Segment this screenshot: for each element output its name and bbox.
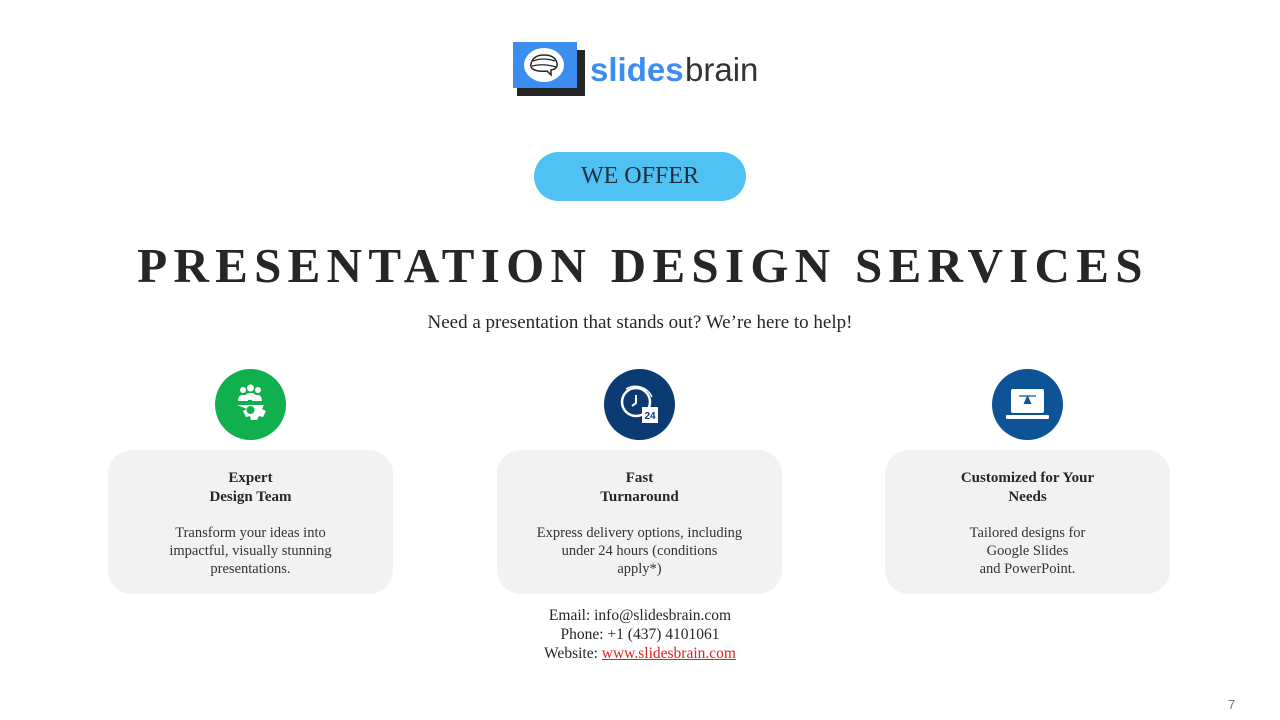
badge: we offer xyxy=(534,152,746,201)
page number: 7 xyxy=(1228,697,1235,712)
icon: clock 24 xyxy=(604,369,675,440)
card: fast turnaround xyxy=(497,450,782,594)
contact info: Phone: +1 (437) 4101061 xyxy=(560,626,720,643)
logo xyxy=(513,42,758,96)
subtitle: Need a presentation that stands out? We’re here to help! xyxy=(428,312,852,333)
contact info: Email: info@slidesbrain.com xyxy=(549,607,731,624)
logo: brain xyxy=(685,51,758,88)
card: fast turnaround: Express delivery options, including xyxy=(537,525,742,541)
card: expert design team: impactful, visually stunning xyxy=(169,543,332,559)
card: expert design team xyxy=(108,450,393,594)
card: fast turnaround: apply*) xyxy=(617,561,662,577)
card: fast turnaround: under 24 hours (conditions xyxy=(562,543,717,559)
icon: laptop design xyxy=(992,369,1063,440)
card: expert design team: presentations. xyxy=(210,561,291,577)
contact info: Website: www.slidesbrain.com xyxy=(544,645,736,662)
card: fast turnaround: Turnaround xyxy=(600,489,679,505)
card: customized: Google Slides xyxy=(987,543,1068,559)
logo: slides xyxy=(590,51,684,88)
card: expert design team: Expert xyxy=(228,470,273,486)
icon: clock 24: 24 xyxy=(644,411,656,422)
card: customized: Customized for Your xyxy=(961,470,1094,486)
title: PRESENTATION DESIGN SERVICES xyxy=(137,238,1149,293)
card: expert design team: Transform your ideas into xyxy=(175,525,326,541)
card: expert design team: Design Team xyxy=(209,489,292,505)
badge: we offer: WE OFFER xyxy=(581,163,699,189)
card: customized: Needs xyxy=(1008,489,1047,505)
icon: team gear xyxy=(215,369,286,440)
card: customized xyxy=(885,450,1170,594)
contact info xyxy=(544,607,736,662)
card: customized: and PowerPoint. xyxy=(980,561,1075,577)
card: fast turnaround: Fast xyxy=(626,470,653,486)
card: customized: Tailored designs for xyxy=(970,525,1085,541)
